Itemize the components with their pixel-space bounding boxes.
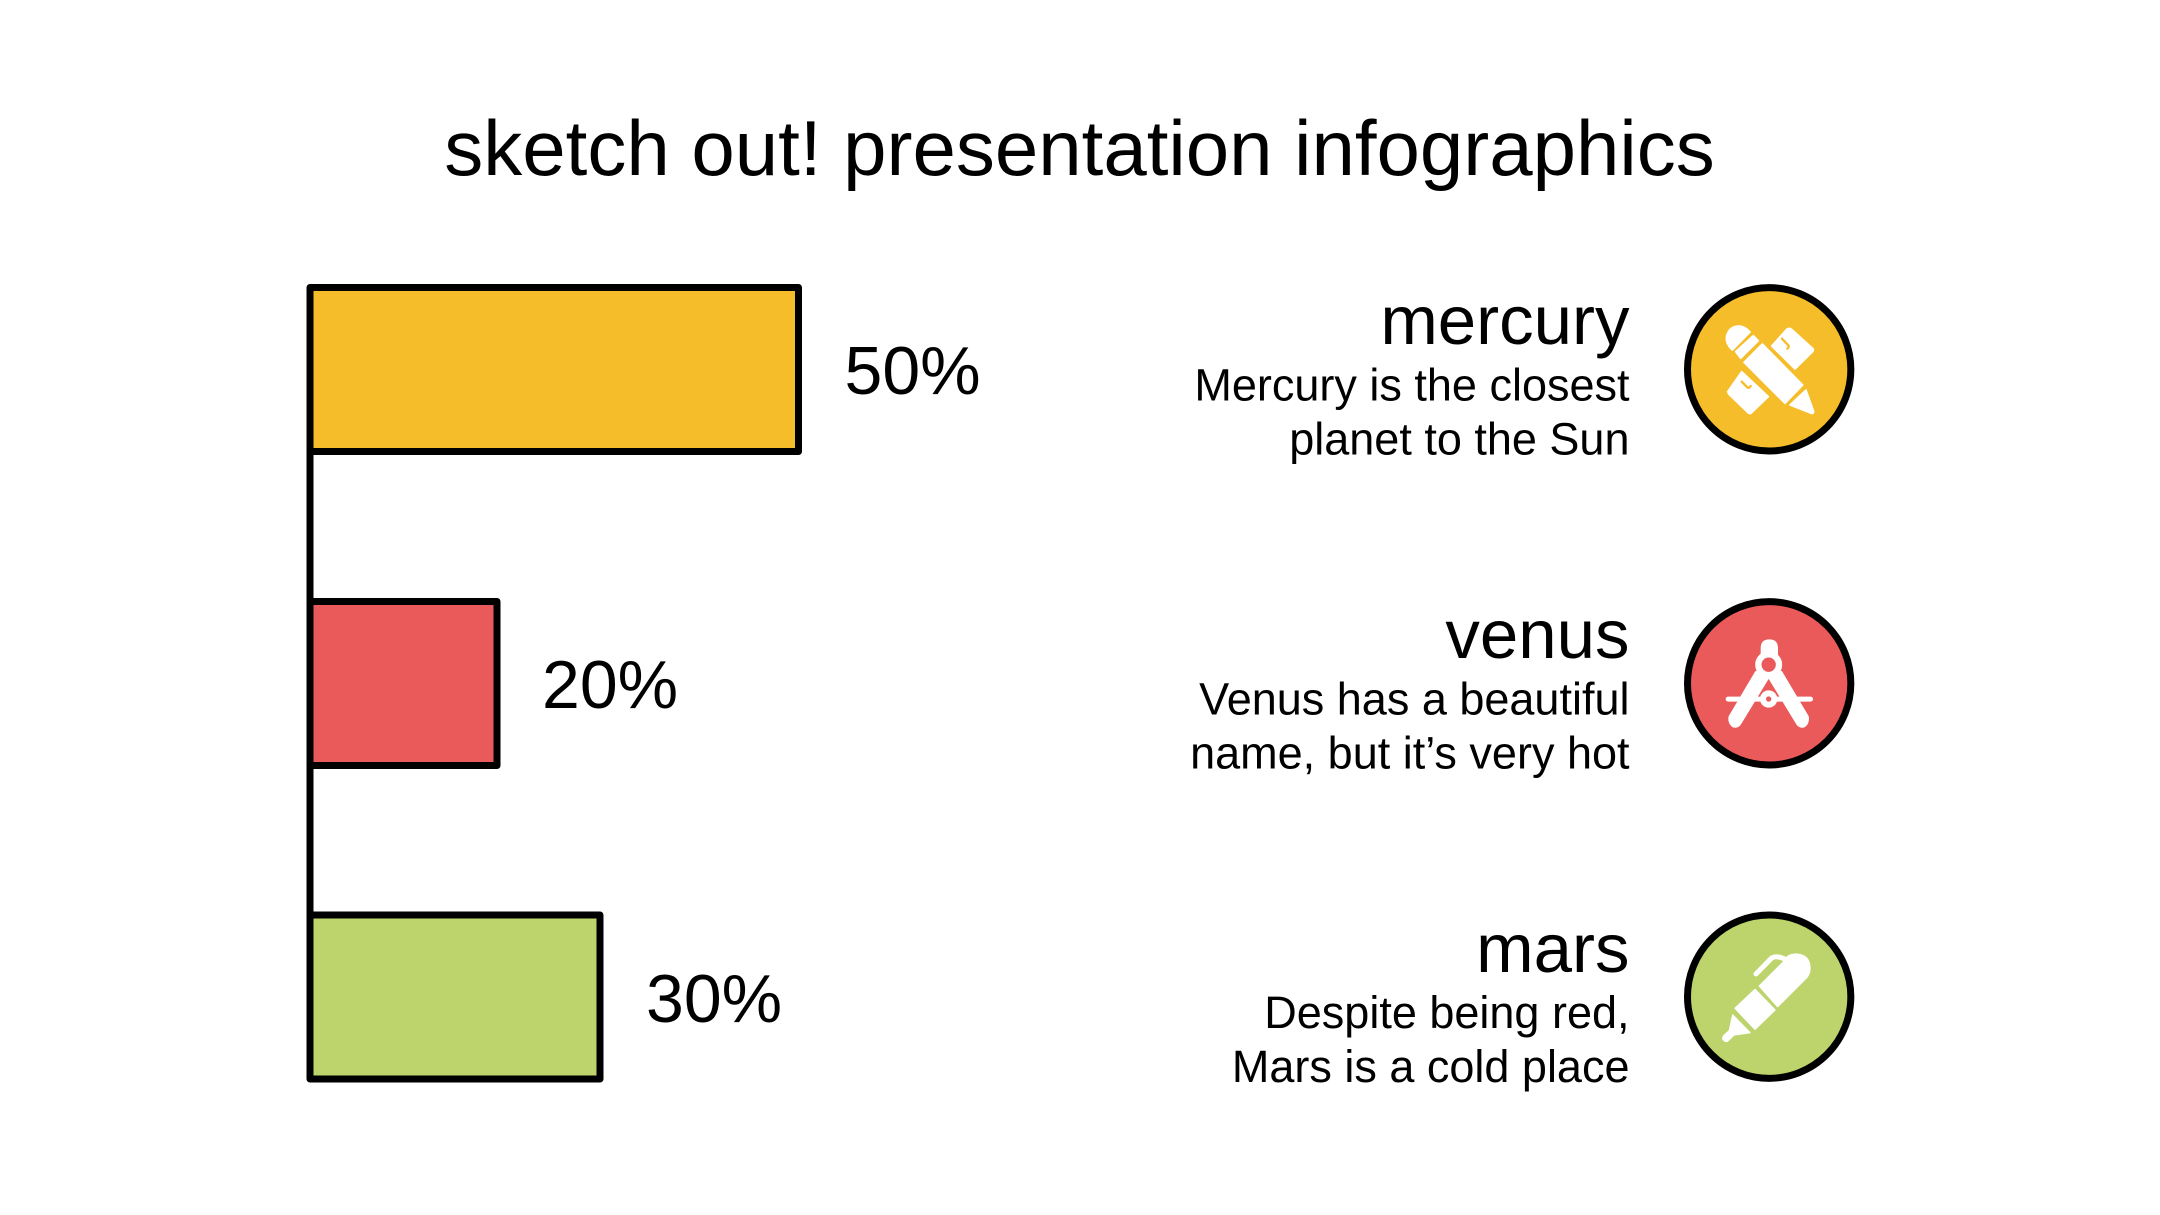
text block: venus <box>1190 596 1630 778</box>
description: mercury: planet to the Sun <box>1289 414 1630 464</box>
bar chart <box>310 288 981 1079</box>
description: mars: Despite being red, <box>1264 987 1630 1038</box>
icon: drafting compass <box>1687 602 1851 765</box>
description: mars: Mars is a cold place <box>1232 1041 1630 1092</box>
value: 50%: 50% <box>844 333 981 409</box>
heading: venus: venus <box>1445 596 1630 673</box>
bar: mercury 50% <box>310 288 798 452</box>
bar: venus 20% <box>310 602 497 766</box>
description: mercury: Mercury is the closest <box>1194 360 1630 410</box>
heading: mars: mars <box>1476 910 1630 987</box>
bar: mars 30% <box>310 915 600 1079</box>
heading: mercury: mercury <box>1380 282 1630 359</box>
value: 30%: 30% <box>646 961 782 1037</box>
icon: marker pen <box>1687 915 1851 1078</box>
chart axis <box>306 288 314 1078</box>
description: venus: Venus has a beautiful <box>1199 674 1630 724</box>
description: venus: name, but it’s very hot <box>1190 728 1630 778</box>
text block: mercury <box>1194 282 1630 464</box>
icon: pencil and ruler <box>1687 288 1851 451</box>
text block: mars <box>1232 910 1630 1092</box>
value: 20%: 20% <box>542 647 678 723</box>
title: sketch out! presentation infographics <box>444 104 1715 192</box>
